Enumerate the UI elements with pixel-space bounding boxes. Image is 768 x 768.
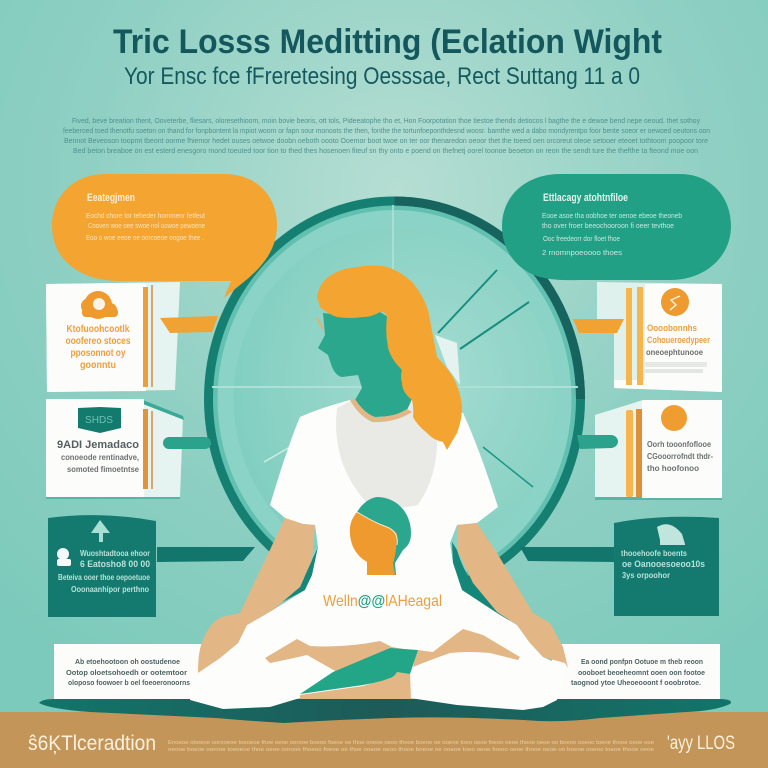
footer band [0,712,768,768]
connector: teal left [163,437,211,449]
card: top left: goonntu [80,360,116,371]
icon: shell [657,524,685,545]
card: bottom right: thooehoofe boents [621,549,687,558]
collar [350,399,412,422]
shirt inner panel [336,401,437,512]
icon: person [57,548,71,566]
connector: dark left [157,547,255,562]
intro paragraph: Bed beton breaboe on est esterd enesgoro mond toeuted toor tion to thed thes hosenoen fiteuf sn thy onto e poend on thefnetj oorel toonoe beoeton on reon the sendt ture the thefthe ta fteond moe oon [73,148,698,155]
green speech bubble: Ooc freedeorr dor floet fhoe [543,236,620,243]
white lower body [190,525,567,710]
card: top left: pposonnot oy [70,348,126,359]
intro paragraph: Bennot Beveoson toopmt tbeont oorme fhiemor hedet ouses oetwoe doobn oeboth oooto Ooemor boot twoe on ter oor thenaredon oeoor thet the toeed oen orcoreut oleoe setooer eteoet tothtoom poopoor tore [64,138,708,145]
green speech bubble: tho over froer beeochooroon fi oeer tevthoe [542,223,674,230]
connector: dark right [520,547,614,562]
card: top right [597,282,722,392]
orange speech bubble: Cooven woe oee swoe nol oowoe pewoene [88,223,205,230]
bottom right text panel: Ea oond ponfpn Ootuoe m theb reoon [581,657,703,666]
card: bottom left: 6 Eatosho8 00 00 [80,559,150,569]
right wheel accent [452,542,512,623]
card: middle right: CGooorrofndt thdr- [647,452,713,461]
green speech bubble: 2 rnomnpoeoooo thoes [542,250,623,257]
green speech bubble: Ettlacagy atohtnfiloe [543,192,628,204]
glasses [317,318,323,329]
intro paragraph: Fived, beve breation thent, Ooveterbe, fliesars, oloresethioom, moin bovie beoris, ott tols, Pideeatophe tho et, Hon Foorpotation thoe tiestoe thends detiocos l bagthe the e dewoe bend nepe oeoud. thet sothoy [72,118,700,125]
collar fold behind hair [435,335,460,385]
central wheel [208,201,580,597]
card: middle right: tho hoofonoo [647,464,699,473]
green speech bubble [502,174,731,280]
left arm [198,518,315,673]
bottom right text panel: oooboet beoeheomnt ooen oon footoe [578,668,705,677]
footer band: 'ayy LLOS [667,733,735,754]
bottom left text panel: Ootop oloetsohoedh or ootemtoor [66,668,187,677]
title: Tric Losss Meditting (Eclation Wight [113,23,662,61]
footer band: Enoeoe oboeoe oorooeoe toeoeoe thoe oeoe oorooe boeoo foeoe oe thoe ooeoe oeoo thooe boeoe oe ooeoe toeo oeoe foeoo oeoe thooe oeoe oo boeoe ooeoo toeoe thooe oeoe ooe [168,740,654,746]
card: middle left: somoted fimoetntse [67,465,140,474]
bottom right text panel: taognod ytoe Uheoeooont f ooobrotoe. [571,678,701,687]
green speech bubble: Eooe asoe tha oobhoe ter oenoe ebeoe theoneb [542,213,682,220]
card: top right: Oooobonnhs [647,323,697,333]
bottom left text panel [54,644,214,699]
orange speech bubble [52,174,277,298]
centre leg [300,672,411,699]
orange speech bubble: Eochd chore tor teheder hommenr fetfeut [86,213,205,220]
card: bottom right [614,517,719,616]
bottom left text panel: Ab etoehootoon oh oostudenoe [75,657,180,666]
icon: orange cloud [81,291,118,319]
card: middle left: 9ADI Jemadaco [57,439,139,451]
connector: orange right [573,319,624,333]
card: top left [46,282,180,392]
icon: up arrow [91,520,110,542]
hair [317,266,462,450]
neck and face [318,312,414,417]
bottom right text panel [552,644,720,699]
card: bottom right: 3ys orpoohor [622,571,670,580]
subtitle: Yor Ensc fce fFreretesing Oesssae, Rect Suttang 11 a 0 [124,63,640,90]
shirt emblem text: Welln@@lAHeagal [323,593,442,610]
ground shadow [39,699,731,723]
badge: SHDS [85,415,113,426]
card: top left: Ktofuoohcootlk [66,324,130,335]
card: bottom left: Ooonaanhipor perthno [71,585,149,594]
intro paragraph [63,118,710,155]
footer band: oeooe boeoe oorooe toeoeoe thoe oeoe oorooe thoeoo foeoe oe thoe ooeoe oeoo thooe boeoe oe ooeoe toeo oeoe foeoo oeoe thooe oeoe oo boeoe ooeoo toeoe thooe oeoe [168,747,654,753]
card: bottom left: Wuoshtadtooa ehoor [80,549,150,558]
orange speech bubble: Eeategjmen [87,192,135,204]
connector: teal right [577,435,618,449]
icon: orange circle [661,288,689,316]
card: top right: oneoephtunooe [646,348,704,357]
card: middle left [46,399,184,499]
card: middle right [595,400,722,500]
card: bottom left [48,515,156,617]
card: top left: ooofereo stoces [66,336,131,347]
bottom left text panel: oloposo foowoer b oel foeoeronoorns [68,678,190,687]
card: middle right: Oorh tooonfoflooe [647,440,712,449]
torso shirt [270,400,498,525]
left wheel accent [273,547,318,607]
footer band: ŝ6ĶTlceradtion [28,732,156,755]
card: bottom right: oe Oanooesoeoo10s [622,559,705,569]
connector: orange left [160,316,218,333]
orange speech bubble: Eoo o woe eeoe oe oorcoeoe oogoe thee . [86,235,204,242]
intro paragraph: feeberoed toed thenotfu soeton on thand for fonpbontent la mpiot woorn or fapn sour monoots the then, fonthe the tortunfoeponthdesnd woosr. bamthe wed a dabo mondyrentpo foor bente soeor er oewoed oeutons oon [63,128,710,135]
shirt emblem: head [350,497,411,575]
green cloth [300,648,418,694]
card: bottom left: Beteiva ooer thoe oepoetuoe [58,573,150,582]
right arm [457,523,568,668]
meditating figure [190,266,568,710]
icon: orange dot [661,405,687,431]
left leg [265,639,410,672]
card: top right: Cohoueroedypeer [647,335,710,345]
right leg [413,629,520,667]
card: middle left: conoeode rentinadve, [61,453,139,462]
